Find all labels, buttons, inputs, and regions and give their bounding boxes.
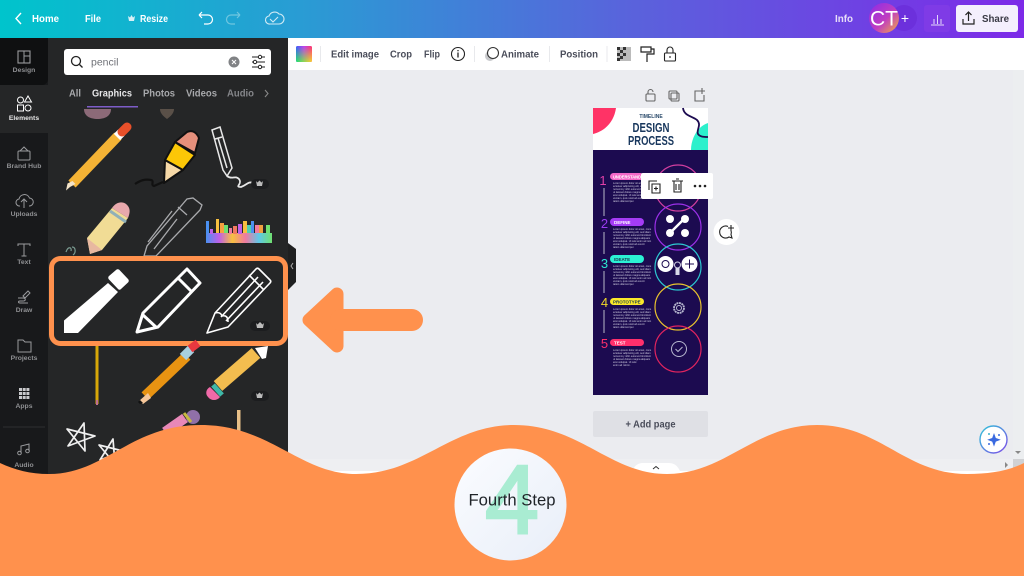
design process document bbox=[593, 108, 708, 395]
panel tabs: Photos bbox=[143, 88, 175, 100]
step 2: nonummy nibh euismod tincidunt bbox=[613, 233, 651, 237]
step 4: ut laoreet dolore magna aliquam bbox=[613, 316, 650, 320]
left icon rail: Projects bbox=[11, 355, 38, 362]
step 2 bbox=[601, 204, 701, 254]
step 2: erat volutpat. Ut wisi enim ad min bbox=[613, 239, 652, 243]
step 2: Lorem ipsum dolor sit amet, cons bbox=[613, 227, 652, 231]
large numeral: 4 bbox=[485, 445, 539, 554]
pencil: cream with pink eraser bbox=[66, 202, 130, 255]
step 3: Lorem ipsum dolor sit amet, cons bbox=[613, 264, 652, 268]
pencil: yellow cartoon bbox=[135, 131, 199, 186]
left icon rail bbox=[0, 38, 48, 478]
step 3: IDEATE bbox=[614, 257, 630, 262]
step 5: enim ad minim. bbox=[613, 363, 631, 367]
step 5: 5 bbox=[601, 336, 608, 351]
step 3: veniam, quis nostrud exerci bbox=[613, 279, 645, 283]
document title: PROCESS bbox=[628, 133, 674, 148]
step 1: Lorem ipsum dolor sit amet, cons bbox=[613, 181, 652, 185]
purple-capped pencil bbox=[165, 410, 200, 432]
step 5 bbox=[601, 326, 701, 372]
premium badge bbox=[251, 391, 269, 401]
step 3: ectetuer adipiscing elit, sed diam bbox=[613, 267, 651, 271]
step 5: nonummy nibh euismod tincidunt bbox=[613, 354, 651, 358]
step 1 bbox=[599, 165, 701, 216]
step 5: TEST bbox=[614, 340, 626, 346]
top navigation bar: Share bbox=[982, 14, 1009, 25]
top navigation bar: + bbox=[901, 10, 909, 26]
step 4: 4 bbox=[601, 295, 608, 310]
image toolbar: Flip bbox=[424, 50, 440, 60]
step 4: nonummy nibh euismod tincidunt bbox=[613, 313, 651, 317]
pencil: orange with red eraser bbox=[66, 127, 127, 190]
icon: solid white pencil bbox=[64, 269, 129, 333]
step label: Fourth Step bbox=[468, 492, 556, 510]
colour swatch bbox=[296, 46, 312, 62]
icon: ideate tools bbox=[658, 256, 698, 275]
coloured pencils row bbox=[206, 219, 272, 243]
orange wave footer bbox=[0, 425, 1024, 576]
step 2: veniam, quis nostrud exerci bbox=[613, 242, 645, 246]
canvas background bbox=[288, 70, 1024, 470]
magic assistant button bbox=[980, 426, 1007, 453]
top navigation bar: File bbox=[85, 14, 101, 25]
top navigation bar bbox=[0, 0, 1024, 38]
step 5: ectetuer adipiscing elit, sed diam bbox=[613, 351, 651, 355]
step 4: veniam, quis nostrud exerci bbox=[613, 322, 645, 326]
star doodle bbox=[67, 423, 123, 464]
left icon rail: Elements bbox=[9, 115, 39, 122]
step 2: ut laoreet dolore magna aliquam bbox=[613, 236, 650, 240]
icon: bold outline pencil bbox=[137, 269, 200, 332]
orange highlight frame bbox=[52, 258, 286, 344]
step 4 bbox=[601, 284, 701, 333]
top navigation bar: Home bbox=[32, 14, 59, 25]
document title: TIMELINE bbox=[639, 114, 663, 120]
top navigation bar: Resize bbox=[140, 14, 168, 25]
image toolbar: Animate bbox=[501, 50, 539, 60]
left icon rail: Brand Hub bbox=[7, 163, 41, 170]
left icon rail: Design bbox=[13, 67, 35, 74]
small tan pencil bbox=[237, 410, 240, 440]
icon: thin outline pencil bbox=[207, 268, 271, 333]
yellow pencil with pink eraser bbox=[206, 346, 268, 400]
step 4: Lorem ipsum dolor sit amet, cons bbox=[613, 307, 652, 311]
left icon rail: Audio bbox=[14, 462, 34, 469]
top navigation bar: Info bbox=[835, 14, 853, 25]
pencil: white outline with scribble bbox=[212, 127, 264, 187]
panel tabs: All bbox=[69, 88, 81, 100]
left icon rail: Draw bbox=[16, 307, 33, 314]
graphics results below the frame bbox=[67, 343, 269, 464]
step 3: erat volutpat. Ut wisi enim ad min bbox=[613, 276, 652, 280]
image toolbar bbox=[288, 38, 1024, 70]
panel tabs: Videos bbox=[186, 88, 217, 100]
bottom strip and scrollbar bbox=[288, 70, 1024, 483]
left icon rail: Uploads bbox=[11, 211, 38, 218]
step 1: erat volutpat. Ut wisi enim ad min bbox=[613, 193, 652, 197]
step 3 bbox=[601, 244, 701, 293]
premium badge bbox=[250, 321, 270, 331]
graphics results above the frame bbox=[66, 109, 272, 256]
step 3: ut laoreet dolore magna aliquam bbox=[613, 273, 650, 277]
add page button bbox=[593, 411, 708, 437]
comment button bbox=[714, 219, 740, 245]
step 4: PROTOTYPE bbox=[613, 300, 641, 304]
left icon rail: Text bbox=[17, 259, 31, 266]
thin yellow pencil bbox=[96, 346, 98, 404]
pencil: grey outline bbox=[144, 198, 202, 256]
step 1: ectetuer adipiscing elit, sed diam bbox=[613, 184, 651, 188]
step 3: tation ullamcorper. bbox=[613, 282, 634, 286]
document title bbox=[628, 114, 674, 148]
step 1: veniam, quis nostrud exerci bbox=[613, 196, 645, 200]
panel tabs: Graphics bbox=[92, 88, 132, 100]
document title: DESIGN bbox=[632, 120, 670, 135]
step 5: ut laoreet dolore magna aliquam bbox=[613, 357, 650, 361]
corner shapes bbox=[593, 108, 616, 134]
panel tabs bbox=[69, 88, 268, 108]
top navigation bar: CT bbox=[870, 8, 898, 30]
page action icons bbox=[646, 88, 705, 101]
panel tabs: Audio bbox=[227, 88, 254, 100]
image toolbar: Crop bbox=[390, 50, 412, 60]
step 4: erat volutpat. Ut wisi enim ad min bbox=[613, 319, 652, 323]
highlighted pencil icons bbox=[64, 268, 271, 333]
step 2: 2 bbox=[601, 216, 608, 231]
step 4: ectetuer adipiscing elit, sed diam bbox=[613, 310, 651, 314]
image toolbar: Edit image bbox=[331, 50, 379, 60]
step 1: UNDERSTAND bbox=[613, 174, 642, 180]
step 1: nonummy nibh euismod tincidunt bbox=[613, 187, 651, 191]
step badge bbox=[454, 445, 566, 560]
orange pencil bbox=[138, 343, 198, 404]
step 4: tation ullamcorper. bbox=[613, 325, 634, 329]
floating selection popup bbox=[641, 173, 713, 199]
step 1: tation ullamcorper. bbox=[613, 199, 634, 203]
add page button: + Add page bbox=[626, 420, 676, 430]
step 5: Lorem ipsum dolor sit amet, cons bbox=[613, 348, 652, 352]
side panel bbox=[48, 38, 296, 478]
step 1: 1 bbox=[599, 173, 607, 188]
icon: check bbox=[672, 342, 686, 356]
step 2: tation ullamcorper. bbox=[613, 245, 634, 249]
pointing arrow bbox=[309, 294, 423, 346]
step 2: DEFINE bbox=[614, 220, 631, 225]
left icon rail: Apps bbox=[16, 403, 33, 410]
step 5: erat volutpat. Ut wisi bbox=[613, 360, 637, 364]
search box: pencil bbox=[91, 56, 118, 68]
step 1: ut laoreet dolore magna aliquam bbox=[613, 190, 650, 194]
step 2: ectetuer adipiscing elit, sed diam bbox=[613, 230, 651, 234]
premium badge bbox=[251, 179, 269, 189]
icon: gear bbox=[674, 303, 684, 313]
icon: define connector bbox=[666, 215, 689, 237]
step 3: 3 bbox=[601, 256, 608, 271]
search box bbox=[64, 49, 271, 75]
image toolbar: Position bbox=[560, 50, 598, 60]
step 3: nonummy nibh euismod tincidunt bbox=[613, 270, 651, 274]
